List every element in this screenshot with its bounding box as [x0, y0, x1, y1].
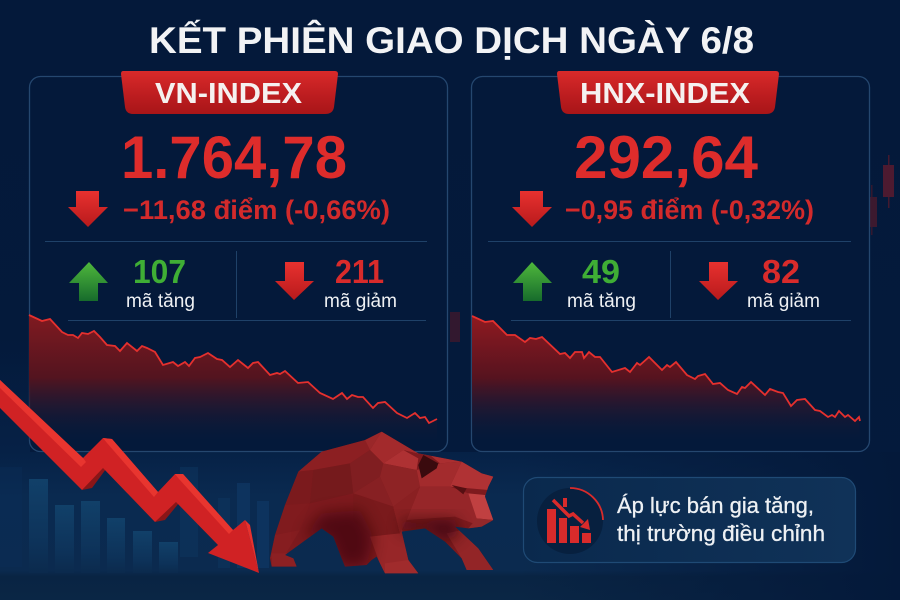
area chart: VN-INDEX	[29, 315, 437, 440]
stat: advancing	[69, 253, 195, 312]
panel: HNX-INDEX	[472, 71, 870, 452]
value: HNX-INDEX: 292,64	[574, 124, 759, 191]
badge: VN-INDEX	[121, 71, 338, 114]
stat: declining: 211	[335, 253, 384, 290]
change text: −0,95 điểm (-0,32%)	[565, 195, 814, 225]
change text: −11,68 điểm (-0,66%)	[123, 195, 390, 225]
shading	[303, 510, 373, 567]
callout	[524, 478, 856, 562]
stat: declining	[275, 253, 397, 312]
callout text: thị trường điều chỉnh	[617, 521, 825, 546]
icon: change arrow down	[512, 191, 552, 227]
stat: declining: mã giảm	[747, 291, 820, 312]
faint background candlesticks	[450, 155, 894, 342]
stat: declining	[699, 253, 820, 312]
panel frame: HNX-INDEX	[472, 76, 870, 452]
stat: advancing: 107	[133, 253, 186, 290]
panel: VN-INDEX	[29, 71, 448, 452]
stat: advancing: mã tăng	[126, 291, 195, 312]
title: KẾT PHIÊN GIAO DỊCH NGÀY 6/8	[149, 19, 754, 61]
callout text	[617, 493, 825, 546]
callout text: Áp lực bán gia tăng,	[617, 493, 814, 518]
panel frame: VN-INDEX	[30, 76, 448, 452]
icon: change arrow down	[68, 191, 108, 227]
stat: advancing: mã tăng	[567, 291, 636, 312]
big falling arrow	[0, 380, 259, 573]
badge: VN-INDEX: VN-INDEX	[155, 78, 303, 110]
area chart: HNX-INDEX	[472, 316, 860, 440]
stat: advancing: 49	[582, 253, 620, 290]
stat: advancing	[513, 253, 636, 312]
badge: HNX-INDEX: HNX-INDEX	[580, 78, 751, 110]
value: VN-INDEX: 1.764,78	[121, 124, 347, 191]
badge: HNX-INDEX	[557, 71, 779, 114]
stat: declining: 82	[762, 253, 800, 290]
background blue bars	[0, 467, 269, 573]
bear	[270, 432, 494, 574]
dividers	[45, 242, 427, 320]
stat: declining: mã giảm	[324, 291, 397, 312]
dividers	[488, 242, 851, 320]
icon: falling bars	[537, 488, 603, 554]
